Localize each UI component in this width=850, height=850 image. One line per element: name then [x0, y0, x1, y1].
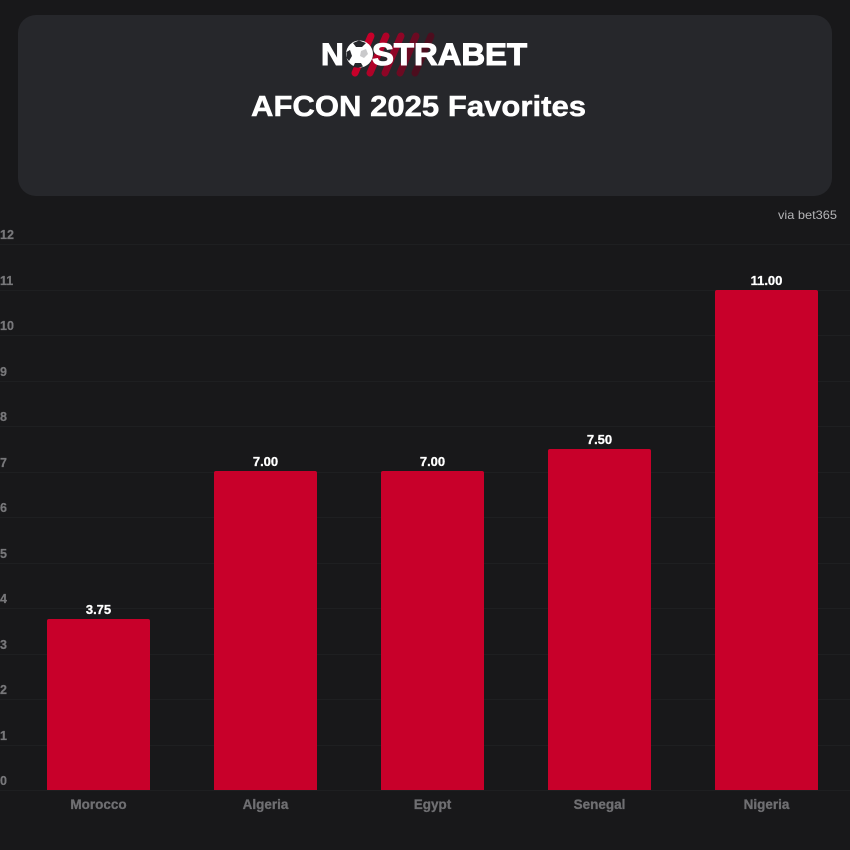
y axis labels: 0	[0, 774, 7, 788]
panel: header	[18, 15, 832, 196]
y axis labels	[0, 228, 14, 788]
bar: Nigeria	[715, 273, 818, 812]
chart: odds bar chart	[0, 228, 850, 812]
logo wordmark: STRABET	[372, 36, 527, 72]
y axis labels: 12	[0, 228, 14, 242]
title: AFCON 2025 Favorites	[251, 91, 586, 123]
bar: Nigeria: 11.00	[751, 273, 782, 288]
bar: Morocco: Morocco	[70, 797, 127, 812]
icon: football	[346, 40, 373, 68]
bar: Algeria	[214, 454, 317, 812]
logo wordmark: N	[321, 36, 344, 72]
bar: Senegal: 7.50	[587, 432, 612, 447]
source note: via bet365	[778, 208, 837, 222]
y axis labels: 9	[0, 365, 7, 379]
bar: Algeria: 7.00	[253, 454, 278, 469]
bar: Algeria: Algeria	[243, 797, 289, 812]
bar: Nigeria: Nigeria	[744, 797, 790, 812]
y axis labels: 6	[0, 501, 7, 515]
y axis labels: 3	[0, 638, 7, 652]
y axis labels: 7	[0, 456, 7, 470]
bar: Senegal: Senegal	[574, 797, 625, 812]
y axis labels: 2	[0, 683, 7, 697]
bar: Egypt: 7.00	[420, 454, 445, 469]
bar: Egypt	[381, 454, 484, 812]
bar: Egypt: Egypt	[414, 797, 452, 812]
bar: Morocco: 3.75	[86, 602, 111, 617]
bar: Morocco	[47, 602, 150, 812]
y axis labels: 4	[0, 592, 7, 606]
y axis labels: 11	[0, 274, 13, 288]
bar: Senegal	[548, 432, 651, 812]
logo stripes	[355, 36, 431, 73]
y axis labels: 8	[0, 410, 7, 424]
logo: Nostrabet	[321, 36, 527, 73]
y axis labels: 1	[0, 729, 7, 743]
y axis labels: 10	[0, 319, 14, 333]
y axis labels: 5	[0, 547, 7, 561]
